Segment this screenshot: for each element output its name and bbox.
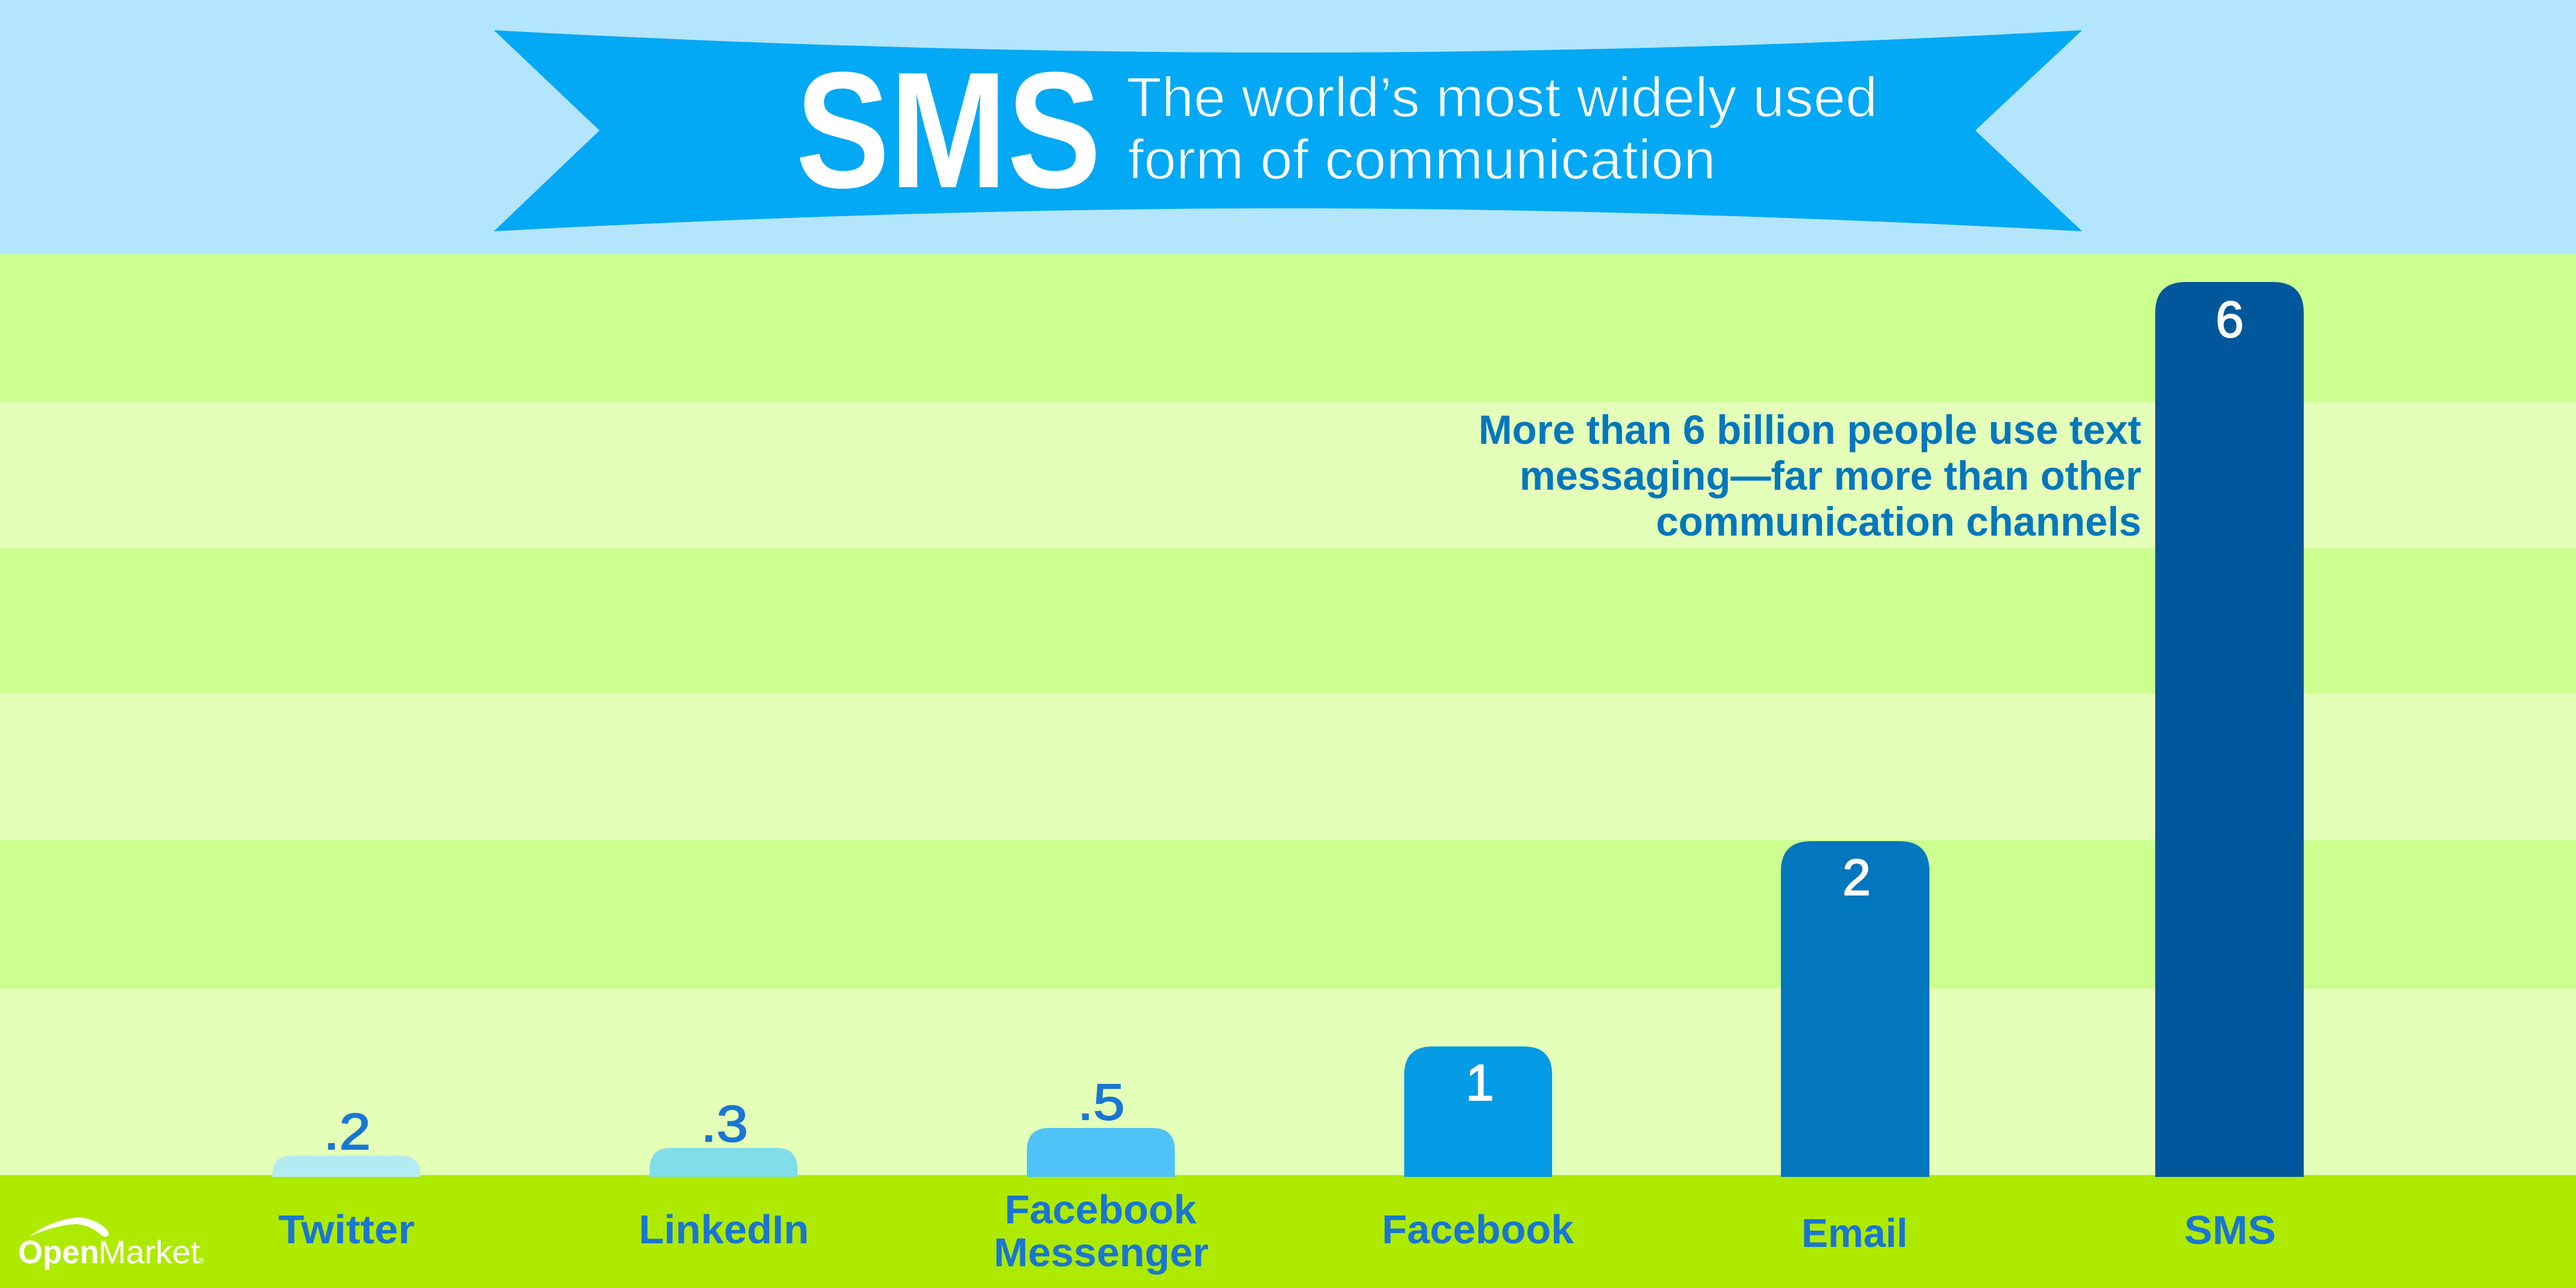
label: LinkedIn: LinkedIn: [639, 1207, 809, 1252]
subtitle: form of communication: [1128, 128, 1716, 191]
subtitle: [1127, 66, 1878, 191]
value: 6: 6: [2216, 291, 2244, 348]
label: Facebook: Facebook: [1382, 1207, 1574, 1252]
header background: [0, 0, 2576, 255]
callout text: More than 6 billion people use text: [1478, 407, 2141, 453]
bar: SMS: [2155, 282, 2304, 1253]
value: .5: .5: [1078, 1074, 1125, 1130]
logo: OpenMarket: [18, 1217, 205, 1270]
value: .2: .2: [324, 1103, 371, 1160]
chart background bands: [0, 254, 2576, 1176]
logo wordmark: Market: [98, 1234, 200, 1270]
label: Email: Email: [1801, 1211, 1908, 1256]
label: Twitter: Twitter: [278, 1207, 415, 1252]
bar: Twitter: [272, 1103, 420, 1252]
callout text: [1478, 407, 2141, 545]
callout text: messaging—far more than other: [1520, 453, 2141, 499]
bar: LinkedIn: [639, 1095, 809, 1252]
value: 2: 2: [1843, 849, 1871, 906]
title banner: [494, 30, 2082, 231]
footer strip: [0, 1175, 2576, 1288]
label: Facebook Messenger: Facebook: [1005, 1187, 1197, 1232]
bar: Facebook Messenger: [994, 1074, 1209, 1275]
label: Facebook Messenger: Messenger: [994, 1230, 1209, 1275]
logo wordmark: Open: [18, 1234, 99, 1270]
value: 1: 1: [1466, 1054, 1494, 1111]
bar: Facebook: [1382, 1046, 1574, 1252]
callout text: communication channels: [1656, 499, 2141, 545]
label: SMS: SMS: [2184, 1208, 2276, 1253]
logo wordmark: ®: [198, 1255, 205, 1265]
subtitle: The world’s most widely used: [1127, 66, 1878, 129]
banner ribbon shape: [494, 30, 2082, 231]
bar: Email: [1781, 841, 1929, 1256]
value: .3: .3: [701, 1095, 748, 1152]
label: Facebook Messenger: [994, 1187, 1209, 1275]
logo wordmark: [18, 1234, 205, 1270]
title: SMS: SMS: [796, 38, 1101, 223]
logo swoosh: [29, 1217, 109, 1237]
